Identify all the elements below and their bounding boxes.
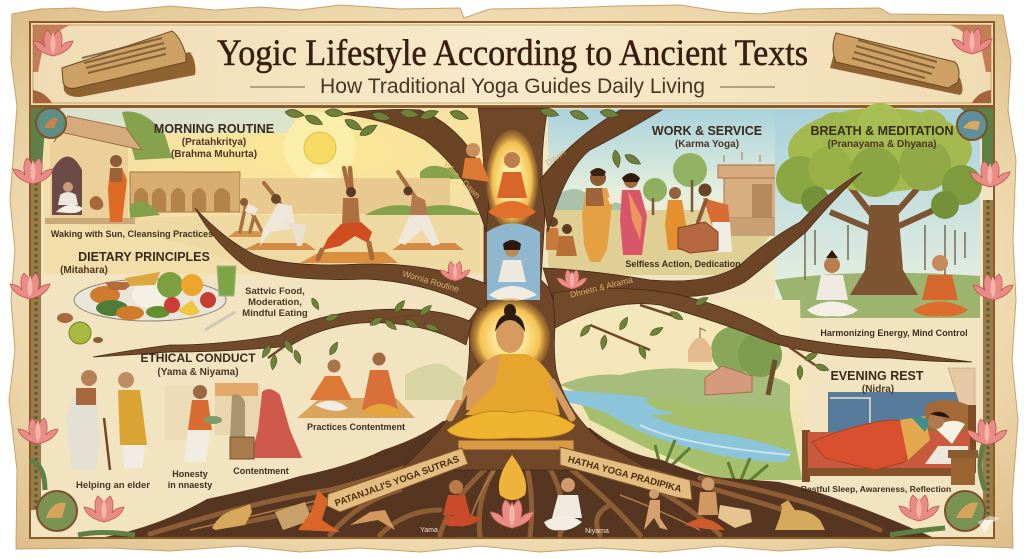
caption: restful sleep: Restful Sleep, Awareness, Reflection bbox=[801, 484, 951, 494]
trees behind workers bbox=[643, 153, 707, 215]
subheading: Pranayama and Dhyana: (Pranayama & Dhyana) bbox=[828, 139, 936, 150]
courtyard wall with arches bbox=[130, 172, 480, 222]
label: Worn Routine: Wornia Routine bbox=[401, 268, 461, 294]
medallion top left bbox=[36, 108, 66, 138]
central seated Buddha bbox=[447, 298, 575, 450]
tree trunk and limbs bbox=[93, 106, 972, 470]
text: ethical conduct bbox=[140, 351, 256, 378]
scene: river landscape bbox=[552, 300, 805, 482]
seated orange sage bbox=[685, 478, 725, 530]
distant hills bbox=[548, 189, 660, 215]
torso bbox=[466, 354, 558, 410]
yogi on mat: small bending figure bbox=[228, 198, 265, 237]
subheading lines: (Brahma Muhurta) bbox=[171, 149, 257, 160]
underground roots area bbox=[105, 421, 932, 537]
text: breath and meditation bbox=[810, 124, 954, 150]
red meditator with Yama label bbox=[420, 480, 482, 534]
caption: practices contentment: Practices Contentment bbox=[307, 422, 405, 432]
label: Niyama: Niyama bbox=[585, 528, 609, 535]
flame lotus bbox=[490, 455, 534, 528]
morning branch bbox=[195, 208, 490, 312]
text: dietary principles bbox=[60, 250, 210, 276]
text: dietary principles: DIETARY PRINCIPLES bbox=[78, 250, 210, 264]
label: Dharma: Dhrietn & Alrama bbox=[569, 274, 634, 300]
bottom left vine bbox=[30, 460, 135, 535]
top right vine bbox=[960, 108, 993, 170]
caption: sattvic food: Sattvic Food, bbox=[245, 286, 305, 297]
banyan canopy bbox=[776, 103, 982, 219]
caption: sattvic food: Moderation, bbox=[248, 297, 302, 308]
subheading: Yama and Niyama: (Yama & Niyama) bbox=[157, 367, 239, 378]
subheading lines: (Pratahkritya) bbox=[182, 137, 246, 148]
subheading: Mitahara: (Mitahara) bbox=[60, 265, 108, 276]
right border pattern bbox=[983, 200, 993, 520]
sun bbox=[270, 112, 375, 225]
food on plate bbox=[90, 272, 216, 320]
corner ornament: top left bbox=[33, 25, 73, 103]
breath branch bbox=[543, 172, 862, 300]
caption: harmonizing energy: Harmonizing Energy, Mind Control bbox=[820, 328, 968, 338]
caption: honesty bbox=[168, 469, 212, 490]
yogi on mat: central warrior bbox=[300, 168, 398, 263]
woman in pink sari bbox=[620, 173, 647, 255]
scene: morning routine bbox=[44, 109, 490, 274]
riverside temple and trees bbox=[688, 326, 782, 395]
seated children bbox=[546, 217, 577, 256]
root figures bbox=[212, 455, 825, 535]
honest boy bbox=[184, 385, 222, 462]
bottom right vine bbox=[890, 440, 985, 535]
caption: helping an elder: Helping an elder bbox=[76, 480, 150, 491]
trunk bbox=[400, 108, 650, 470]
foliage sprigs bbox=[260, 106, 830, 380]
blue niche with seated figure in white bbox=[487, 224, 540, 300]
meditating monk in orange bbox=[913, 255, 968, 316]
crossed legs bbox=[447, 411, 575, 439]
caption: sattvic food: Mindful Eating bbox=[242, 308, 308, 319]
river bbox=[558, 390, 792, 462]
banyan ground bbox=[775, 273, 980, 318]
banner: Hatha Yoga Pradipika: HATHA YOGA PRADIPIKA bbox=[567, 454, 683, 495]
small scroll bottom left bbox=[275, 502, 312, 530]
seated teacher bbox=[362, 352, 405, 416]
caption: honesty: in nnaesty bbox=[168, 480, 212, 490]
medallion bottom left bbox=[37, 491, 77, 531]
orange figure among roots bbox=[298, 490, 340, 532]
curtain bbox=[948, 368, 975, 452]
ornamental frame details bbox=[10, 108, 1013, 535]
faint hills bbox=[405, 364, 464, 400]
sage seated in niche bbox=[56, 182, 83, 213]
river banks bbox=[575, 392, 802, 480]
medallion bottom right bbox=[945, 491, 985, 531]
water pot bbox=[90, 196, 103, 210]
spoon bbox=[205, 312, 235, 330]
kneeling woman bbox=[250, 389, 302, 458]
river sky bbox=[552, 300, 805, 480]
plate bbox=[74, 279, 226, 321]
scene: practices contentment bbox=[297, 352, 464, 418]
small monk on left limb bbox=[462, 143, 490, 182]
yogi on mat: right warrior bbox=[392, 172, 464, 250]
arms bbox=[450, 382, 572, 418]
text: work and service bbox=[652, 124, 762, 150]
mat bbox=[297, 398, 415, 418]
work sky bbox=[548, 109, 808, 279]
green juice glass bbox=[217, 266, 236, 296]
distant forest bbox=[560, 368, 790, 410]
goat left bbox=[212, 504, 252, 530]
white-robed monk with Niyama label bbox=[544, 478, 609, 535]
halo bbox=[470, 298, 550, 378]
banyan trunk and aerial roots bbox=[805, 180, 965, 295]
subtitle: How Traditional Yoga Guides Daily Living bbox=[320, 75, 705, 98]
text: breath and meditation: BREATH & MEDITATION bbox=[810, 124, 954, 138]
subheading: Karma Yoga: (Karma Yoga) bbox=[675, 139, 739, 150]
upper left limb bbox=[340, 110, 490, 232]
text: evening rest: EVENING REST bbox=[830, 369, 924, 383]
scene: dietary principles bbox=[57, 266, 236, 344]
left border pattern bbox=[31, 170, 41, 510]
subtitle flourish: left bbox=[250, 86, 305, 88]
helper in yellow kurta bbox=[118, 372, 147, 468]
label: Dawn left: Wise - Dawn bbox=[442, 159, 483, 201]
subheading: Nidra: (Nidra) bbox=[862, 384, 894, 395]
scene: breath and meditation bbox=[775, 103, 982, 318]
title: Yogic Lifestyle According to Ancient Texts bbox=[217, 33, 808, 74]
bedside table bbox=[948, 450, 978, 458]
upper right limb bbox=[540, 110, 662, 232]
background trees bbox=[122, 111, 485, 180]
tree carved labels bbox=[401, 147, 634, 300]
bed bbox=[802, 400, 976, 482]
morning sky bbox=[44, 109, 490, 274]
river reeds bbox=[655, 440, 768, 482]
glowing niche with upper seated figure bbox=[486, 130, 538, 230]
caption: contentment: Contentment bbox=[233, 466, 289, 476]
text: work and service: WORK & SERVICE bbox=[652, 124, 762, 138]
scene: evening rest bbox=[802, 368, 978, 485]
courtyard floor bbox=[44, 215, 480, 274]
banner: Patanjali's Yoga Sutras: PATANJALI'S YOGA SUTRAS bbox=[333, 454, 461, 509]
palm-leaf manuscript: left bbox=[62, 31, 195, 97]
meditating woman in white bbox=[807, 250, 858, 316]
border lotuses bbox=[10, 158, 1013, 522]
header panel bbox=[30, 22, 994, 106]
goat right bbox=[775, 500, 825, 530]
large scroll bottom right bbox=[718, 505, 752, 528]
evening branch bbox=[553, 288, 972, 362]
top left vine bbox=[31, 108, 62, 170]
market stall bbox=[165, 383, 260, 440]
woman carrying bricks bbox=[665, 187, 686, 250]
brick pile bbox=[678, 222, 718, 253]
banyan sky bbox=[775, 109, 980, 299]
sleeping woman bbox=[812, 412, 965, 470]
platform bbox=[458, 440, 574, 450]
caption: honesty: Honesty bbox=[172, 469, 208, 479]
yogi on mat: left warrior bbox=[243, 183, 316, 250]
small child bbox=[644, 489, 668, 530]
seated student bbox=[310, 360, 352, 411]
work ground bbox=[548, 210, 790, 275]
lower left branch bbox=[93, 309, 472, 357]
subtitle flourish: right bbox=[720, 86, 775, 88]
label: Dawn right: Dawn bbox=[544, 147, 567, 168]
faint sparkle mark bottom right bbox=[978, 516, 1000, 533]
running figure bbox=[350, 510, 395, 530]
text: ethical conduct: ETHICAL CONDUCT bbox=[140, 351, 256, 365]
corner ornament: top right bbox=[950, 25, 992, 103]
hermitage building bbox=[45, 116, 142, 224]
head bbox=[495, 304, 525, 353]
bedroom wall bbox=[803, 372, 973, 482]
medallion top right bbox=[957, 110, 987, 140]
small lotuses on the branches bbox=[440, 262, 587, 289]
text: evening rest bbox=[830, 369, 924, 395]
teacher in saffron bbox=[582, 168, 623, 262]
scene: ethical conduct bbox=[66, 370, 302, 470]
text: morning routine: MORNING ROUTINE bbox=[154, 122, 274, 136]
banner: Hatha Yoga Pradipika bbox=[560, 447, 692, 500]
subheading lines bbox=[171, 137, 257, 160]
main illustration panel bbox=[30, 107, 994, 538]
caption: sattvic food bbox=[242, 286, 308, 319]
caption: selfless action: Selfless Action, Dedication bbox=[625, 259, 741, 269]
label: Yama: Yama bbox=[420, 527, 438, 534]
elder with cane bbox=[66, 370, 110, 470]
wooden box bbox=[230, 437, 254, 459]
palm-leaf manuscript: right bbox=[830, 33, 962, 95]
bending labourer bbox=[698, 184, 732, 252]
apple and nuts bbox=[57, 313, 103, 344]
text: morning routine bbox=[154, 122, 274, 160]
caption: waking with sun: Waking with Sun, Cleansing Practices bbox=[51, 229, 213, 239]
stone pavilion bbox=[712, 152, 800, 236]
saffron robe bbox=[465, 354, 560, 415]
bedroom window bbox=[828, 392, 960, 440]
scene: work and service bbox=[546, 109, 808, 279]
standing attendant in orange bbox=[108, 155, 127, 222]
